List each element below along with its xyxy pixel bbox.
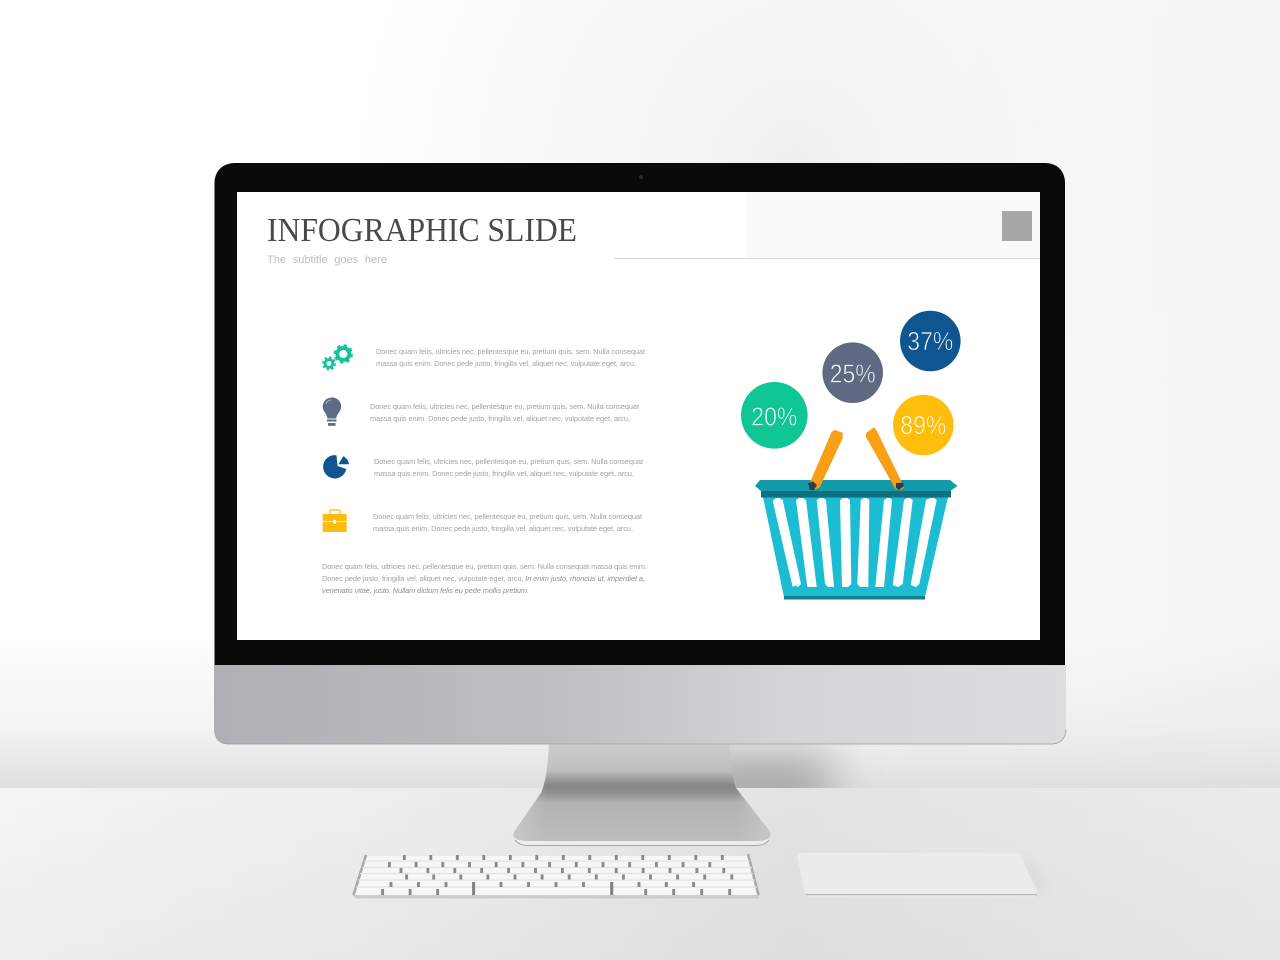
text: closing paragraph: venenatis vitae, justo. Nullam dictum felis eu pede mollis pretium.: [322, 586, 529, 595]
trackpad shadow: [1020, 862, 1046, 892]
header tint: [747, 192, 1040, 258]
text: row 3: massa quis enim. Donec pede justo, fringilla vel, aliquet nec, vulputate eget, arcu,: [374, 469, 634, 478]
text: row 3: Donec quam felis, ultricies nec, pellentesque eu, pretium quis, sem. Nulla consequat: [374, 457, 643, 466]
right handle: [866, 427, 904, 490]
keyboard edges: [354, 854, 758, 895]
basket slots: [773, 498, 937, 587]
chin lower edge: [216, 730, 1066, 744]
monitor chin: [214, 665, 1066, 744]
text: row 1: massa quis enim. Donec pede justo, fringilla vel, aliquet nec, vulputate eget, arcu,: [376, 359, 636, 368]
icon: briefcase: [323, 510, 347, 532]
basket body: [763, 497, 948, 597]
bubble 25%: 25%: [830, 358, 876, 388]
text: closing paragraph: Donec quam felis, ultricies nec, pellentesque eu, pretium quis, sem. Nulla consequat massa quis enim.: [322, 562, 647, 571]
monitor bezel: [214, 163, 1065, 665]
trackpad: [797, 853, 1046, 898]
monitor: [214, 163, 1066, 744]
camera: [639, 175, 643, 179]
logo placeholder: [1002, 211, 1032, 241]
key gaps: [383, 855, 732, 895]
bubble 37%: 37%: [907, 326, 953, 356]
space bar gaps: [474, 882, 612, 895]
icon: shopping basket: [755, 427, 958, 600]
icon: light bulb: [323, 398, 341, 426]
header rule: [614, 258, 1040, 259]
screen: [237, 192, 1040, 640]
text: row 2: [370, 402, 639, 423]
bubble 20%: 20%: [751, 402, 797, 432]
keyboard body: [353, 856, 759, 895]
basket rim: [755, 480, 958, 491]
text: row 1: Donec quam felis, ultricies nec, pellentesque eu, pretium quis, sem. Nulla consequat: [376, 347, 645, 356]
bubble 37%: [900, 311, 961, 371]
trackpad surface: [797, 853, 1038, 894]
text: row 4: massa quis enim. Donec pede justo, fringilla vel, aliquet nec, vulputate eget, arcu,: [373, 524, 633, 533]
bubble 25%: [822, 342, 883, 403]
text: row 1: [376, 347, 645, 368]
trackpad front edge: [806, 894, 1037, 895]
text: row 4: Donec quam felis, ultricies nec, pellentesque eu, pretium quis, sem. Nulla consequat: [373, 512, 642, 521]
text: row 2: massa quis enim. Donec pede justo, fringilla vel, aliquet nec, vulputate eget, arcu,: [370, 414, 630, 423]
monitor stand: [513, 744, 771, 846]
list: icons and text: [322, 345, 647, 595]
bubble 89%: [893, 395, 954, 455]
slide header: [267, 192, 1040, 266]
bubble 20%: [741, 382, 808, 449]
left handle: [808, 430, 843, 490]
text: row 2: Donec quam felis, ultricies nec, pellentesque eu, pretium quis, sem. Nulla consequat: [370, 402, 639, 411]
text: closing paragraph: [322, 562, 647, 595]
keyboard: [353, 854, 759, 898]
subtitle: The subtitle goes here: [267, 254, 387, 266]
chart: percentage bubbles: [741, 311, 961, 455]
text: row 3: [374, 457, 643, 478]
title: INFOGRAPHIC SLIDE: [267, 212, 577, 249]
icon: pie chart: [323, 455, 349, 478]
key row lines: [356, 861, 757, 887]
icon: gears: [323, 345, 352, 370]
basket base strip: [784, 596, 925, 600]
text: row 4: [373, 512, 642, 533]
text: closing paragraph: Donec pede justo, fringilla vel, aliquet nec, vulputate eget, arcu, In enim justo, rhoncus ut, imperdiet a,: [322, 574, 645, 583]
basket rim shadow: [761, 490, 951, 498]
bubble 89%: 89%: [900, 410, 946, 440]
stand shadow on wall: [730, 744, 852, 788]
